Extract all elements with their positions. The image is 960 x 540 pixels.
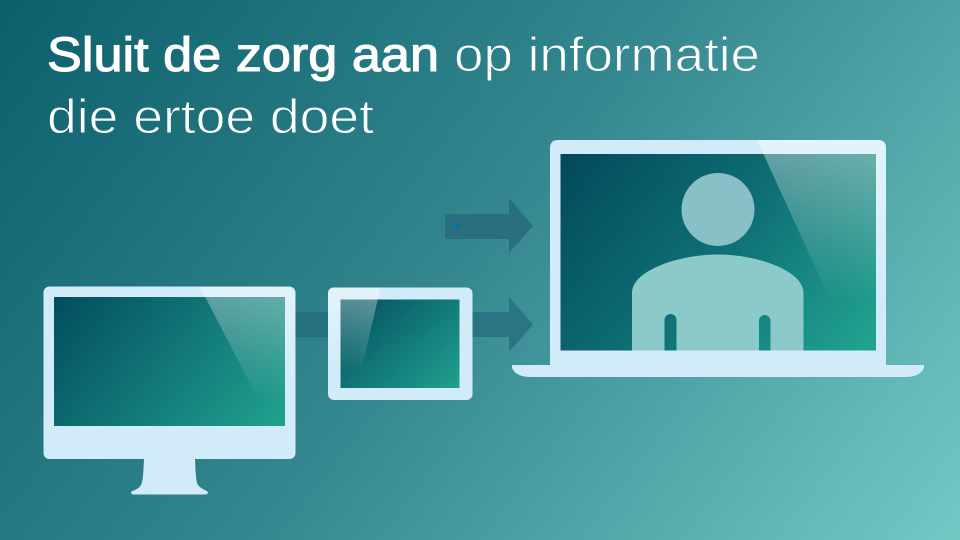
monitor stand (131, 458, 208, 494)
connector bar: monitor to tablet (295, 312, 328, 337)
tablet glare (328, 288, 380, 372)
monitor glare (200, 287, 295, 426)
arrow: tablet to laptop (472, 297, 533, 352)
monitor body (44, 286, 296, 459)
arrow: upper to laptop (445, 198, 533, 253)
title: die ertoe doet (47, 91, 374, 144)
tablet body (328, 288, 472, 400)
title: Sluit de zorg aan (47, 29, 439, 82)
desktop monitor (44, 286, 296, 494)
laptop lid (550, 140, 886, 366)
person body (632, 254, 804, 350)
tablet screen (340, 300, 460, 388)
monitor screen (54, 297, 285, 426)
person icon (632, 173, 804, 350)
laptop base (512, 365, 924, 377)
title: op informatie (454, 29, 760, 82)
person head (682, 173, 754, 246)
laptop (512, 140, 924, 377)
tablet (328, 288, 472, 400)
title (47, 29, 760, 144)
laptop screen (560, 154, 876, 350)
laptop glare (757, 140, 886, 350)
